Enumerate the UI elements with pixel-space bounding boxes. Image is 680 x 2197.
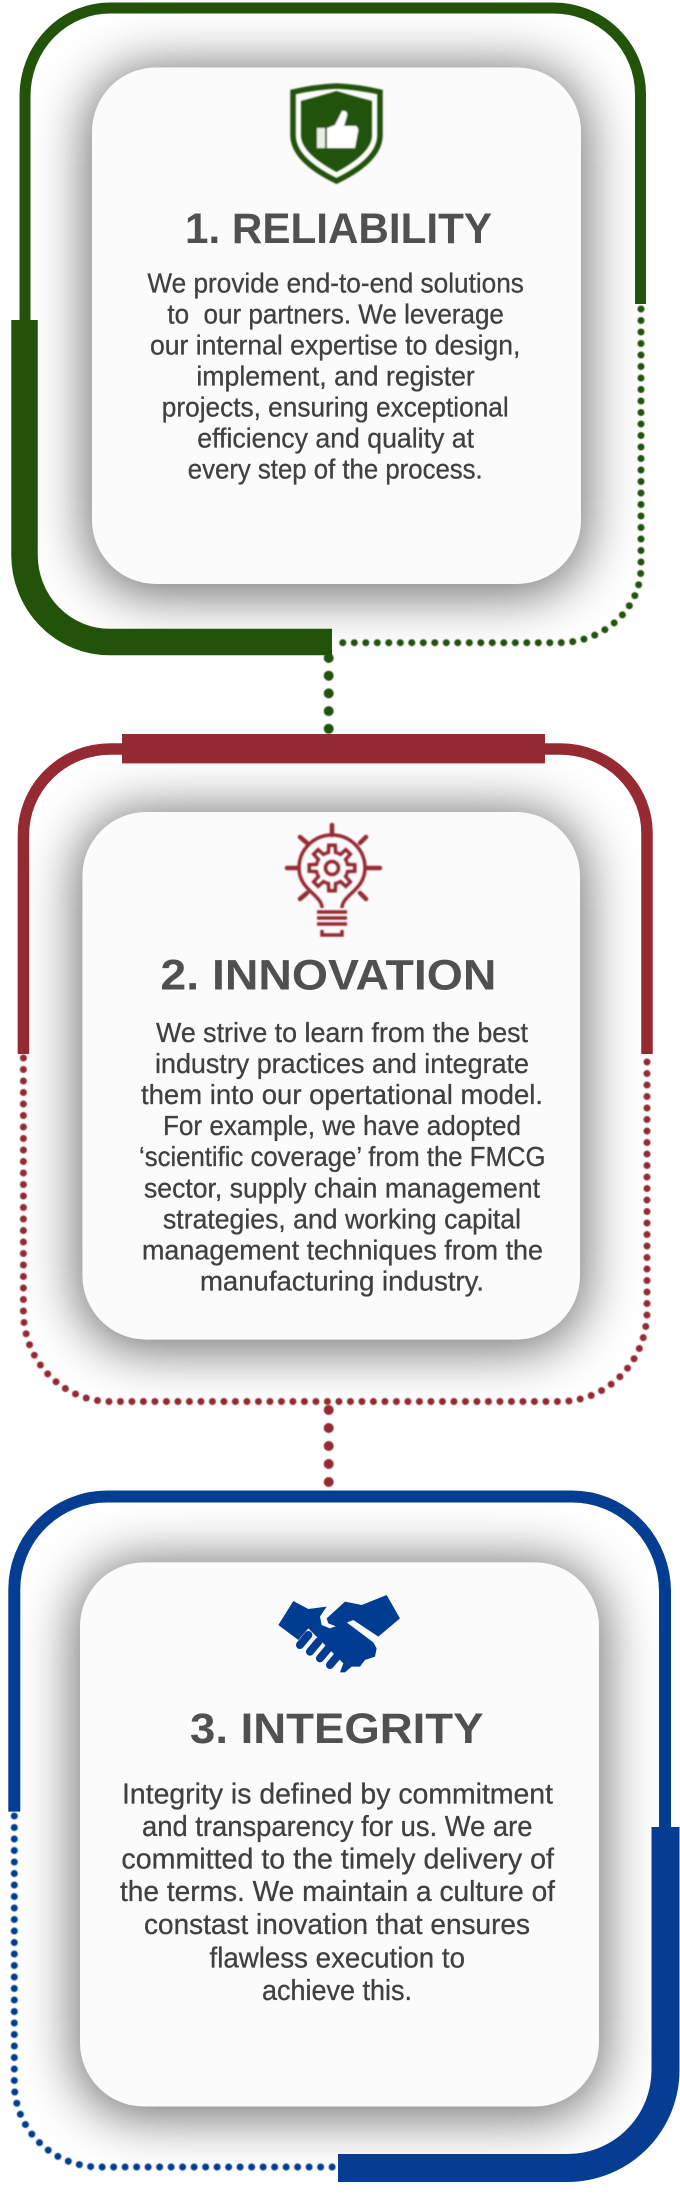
text: integrity body: flawless execution to [210, 1942, 465, 1974]
icon: handshake [278, 1595, 400, 1672]
frame: integrity thick segment [338, 1827, 666, 2168]
text: innovation body: them into our opertational model. [141, 1079, 543, 1110]
frame: reliability thin outline [25, 8, 640, 325]
frame: innovation dotted segment [23, 1058, 647, 1402]
heading: 1. RELIABILITY: 1. RELIABILITY [185, 205, 492, 253]
frame: integrity thin outline [14, 1496, 665, 1827]
frame: integrity dotted segment [14, 1816, 338, 2167]
text: innovation body: manufacturing industry. [200, 1266, 484, 1297]
frame: reliability dotted segment [338, 309, 641, 643]
panel: reliability [24, 8, 641, 643]
icon: shield with thumbs up [293, 86, 380, 181]
text: integrity body: Integrity is defined by commitment [122, 1778, 553, 1810]
card shadow: innovation [76, 810, 586, 1351]
card shadow: integrity [74, 1560, 605, 2118]
text: integrity body: committed to the timely delivery of [121, 1844, 555, 1876]
text: reliability body: projects, ensuring exceptional [162, 392, 509, 422]
text: innovation body: We strive to learn from the best [156, 1017, 528, 1048]
text: reliability body: every step of the process. [188, 454, 483, 484]
text: innovation body: management techniques from the [142, 1234, 543, 1266]
text: reliability body: to our partners. We leverage [167, 298, 504, 330]
text: integrity body: the terms. We maintain a culture of [120, 1876, 556, 1908]
text: innovation body: ‘scientific coverage’ from the FMCG [139, 1141, 546, 1172]
text: integrity body: and transparency for us. We are [142, 1811, 532, 1843]
card shadow: reliability [86, 66, 587, 596]
text: reliability body: We provide end-to-end solutions [147, 268, 524, 298]
text: innovation body: sector, supply chain management [144, 1172, 540, 1203]
text: innovation body: For example, we have adopted [163, 1110, 521, 1141]
connector: innovation to integrity [324, 1410, 334, 1486]
text: reliability body [147, 268, 524, 484]
card: innovation [82, 812, 580, 1340]
panel: integrity [14, 1496, 666, 2168]
frame: innovation thick bar [122, 734, 545, 763]
heading: 3. INTEGRITY: 3. INTEGRITY [190, 1705, 484, 1753]
heading: 2. INNOVATION: 2. INNOVATION [160, 951, 496, 999]
card: integrity [80, 1562, 599, 2106]
frame: innovation thin outline [23, 749, 647, 1054]
text: integrity body: constast inovation that ensures [144, 1909, 530, 1941]
text: innovation body: strategies, and working capital [163, 1203, 521, 1234]
text: reliability body: implement, and register [196, 360, 475, 392]
icon: light bulb with gear [287, 825, 380, 935]
text: reliability body: efficiency and quality at [197, 422, 474, 454]
text: reliability body: our internal expertise to design, [150, 330, 520, 360]
connector: reliability to innovation [324, 658, 334, 734]
text: integrity body [120, 1778, 556, 2007]
frame: reliability thick segment [24, 320, 332, 642]
card: reliability [92, 68, 581, 584]
text: innovation body: industry practices and integrate [155, 1048, 529, 1079]
text: innovation body [139, 1017, 546, 1297]
text: integrity body: achieve this. [262, 1975, 412, 2007]
panel: innovation [23, 734, 647, 1402]
